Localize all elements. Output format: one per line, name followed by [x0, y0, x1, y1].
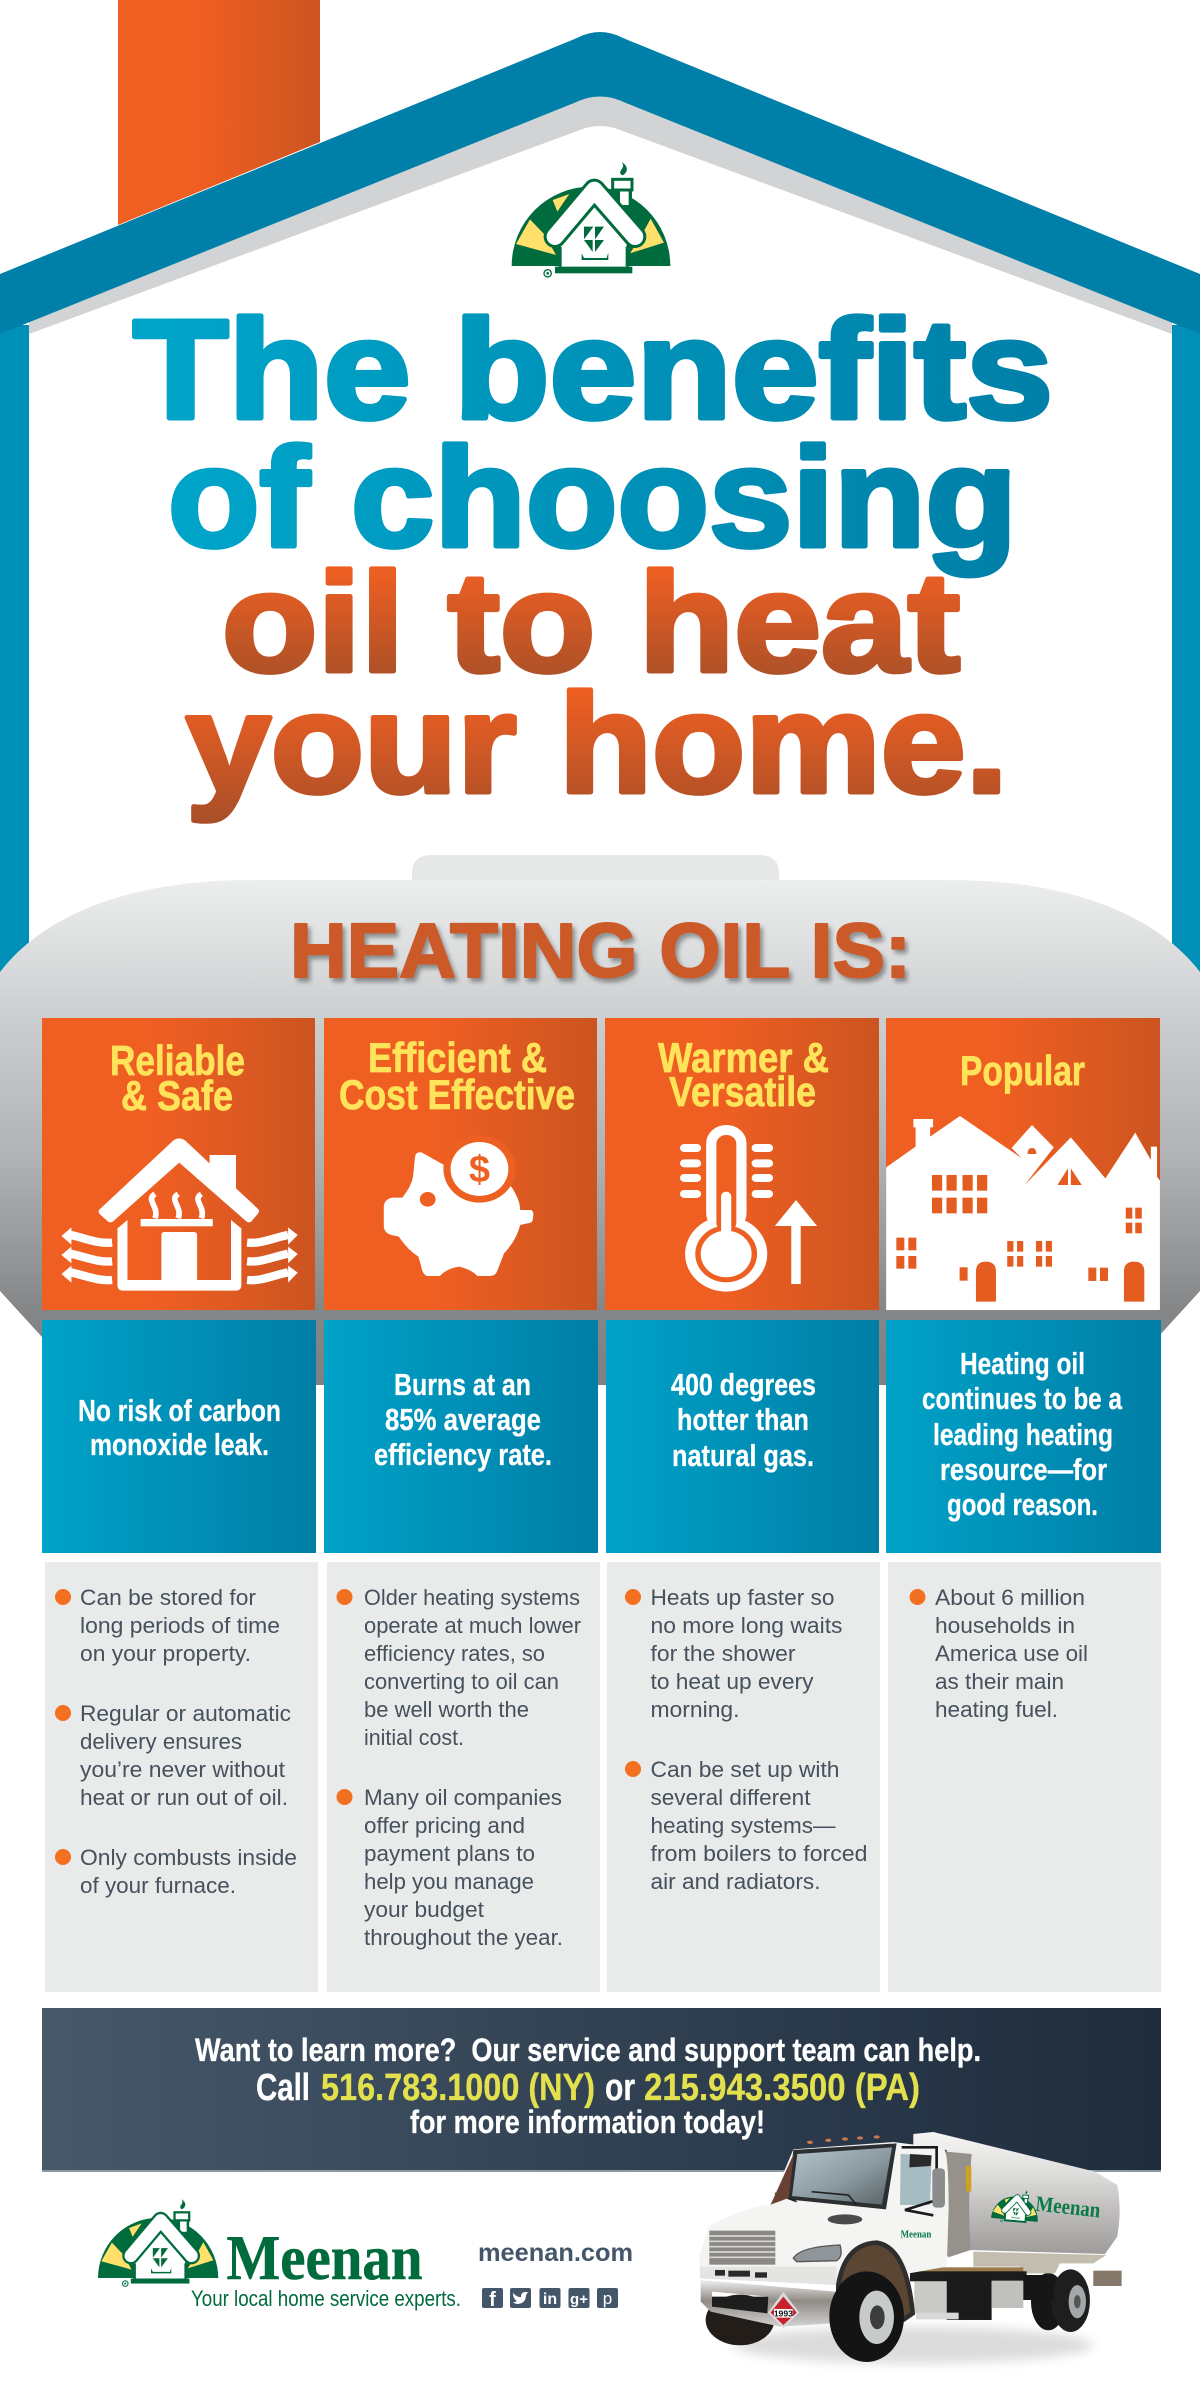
roof underside shadow — [29, 60, 1172, 334]
wordmark: Meenan — [226, 2222, 422, 2293]
panel: efficient and cost effective — [324, 1018, 597, 1310]
title line 1: The benefits — [133, 290, 1053, 448]
list text: initial cost. — [364, 1725, 464, 1750]
heading: efficient and cost effective: Efficient & — [368, 1034, 547, 1081]
heading: reliable and safe: & Safe — [121, 1072, 233, 1119]
list text: air and radiators. — [650, 1869, 820, 1894]
door window — [900, 2147, 937, 2215]
heading: warmer and versatile — [658, 1034, 829, 1115]
heading: warmer and versatile: Versatile — [669, 1068, 816, 1115]
under bumper — [712, 2297, 770, 2313]
list text: heating systems— — [650, 1813, 836, 1838]
text: 400 degrees: natural gas. — [672, 1439, 814, 1473]
list text: Can be stored for — [80, 1585, 256, 1610]
text: heating oil continues: leading heating — [933, 1418, 1113, 1452]
bumper — [701, 2280, 835, 2327]
text: burns at: 85% average — [385, 1403, 541, 1437]
list text: Heats up faster so — [650, 1585, 834, 1610]
panel: bullet list 4 — [888, 1562, 1161, 1992]
hazard placard — [768, 2292, 799, 2328]
list text: to heat up every — [650, 1669, 814, 1694]
list text: of your furnace. — [80, 1873, 236, 1898]
tank logo — [991, 2187, 1040, 2225]
heading: heating oil is: HEATING OIL IS: — [290, 908, 911, 994]
cta line 1: Want to learn more? Our service and support team can help. — [195, 2032, 981, 2068]
cta line 2: phone numbers: or — [605, 2067, 635, 2109]
house walls — [0, 325, 1200, 1005]
list text: as their main — [935, 1669, 1064, 1694]
text: heating oil continues: continues to be a — [922, 1382, 1123, 1416]
cta line 2: phone numbers — [256, 2067, 920, 2109]
mirror — [932, 2168, 945, 2208]
pinterest: p — [603, 2289, 612, 2308]
tank — [913, 2132, 1120, 2257]
cta line 2: phone numbers: 516.783.1000 (NY) — [321, 2067, 595, 2109]
text: heating oil continues: resource—for — [940, 1453, 1107, 1487]
text: no risk: monoxide leak. — [90, 1428, 269, 1462]
heading: efficient and cost effective: Cost Effective — [339, 1071, 575, 1118]
list text: delivery ensures — [80, 1729, 242, 1754]
text: heating oil continues — [922, 1347, 1123, 1522]
list text: payment plans to — [364, 1841, 535, 1866]
chimney — [118, 0, 320, 225]
oil delivery truck — [699, 2132, 1122, 2363]
heading: warmer and versatile: Warmer & — [658, 1034, 829, 1081]
list text: for the shower — [650, 1641, 796, 1666]
list text: America use oil — [935, 1641, 1088, 1666]
oil tank cap — [412, 855, 779, 880]
panel: warmer and versatile — [605, 1018, 879, 1310]
text: burns at: efficiency rate. — [374, 1438, 552, 1472]
roof — [0, 32, 1200, 334]
panel: burns at 85 percent — [324, 1320, 598, 1553]
panel: bullet list 2 — [327, 1562, 600, 1992]
text: heating oil continues: Heating oil — [960, 1347, 1085, 1381]
ground shadow — [733, 2327, 1093, 2363]
list text — [650, 1585, 868, 1894]
side pillar — [771, 2153, 794, 2205]
icon: house with heat arrows — [61, 1138, 298, 1291]
windshield — [775, 2143, 897, 2209]
panel: popular — [886, 1018, 1160, 1310]
title line 4: your home. — [186, 664, 1008, 822]
bullets — [336, 1589, 352, 1805]
title — [133, 290, 1053, 822]
cta line 2: phone numbers: Call — [256, 2067, 310, 2109]
list text: About 6 million — [935, 1585, 1085, 1610]
text: no risk — [78, 1394, 281, 1462]
title line 2: of choosing — [168, 418, 1017, 576]
list text: Many oil companies — [364, 1785, 562, 1810]
heading: reliable and safe — [110, 1037, 245, 1119]
cta line 3: for more information today! — [410, 2104, 765, 2140]
list text: converting to oil can — [364, 1669, 559, 1694]
list text: on your property. — [80, 1641, 251, 1666]
panel: bullet list 1 — [45, 1562, 318, 1992]
title line 3: oil to heat — [222, 543, 960, 701]
headlight — [793, 2245, 841, 2262]
list text: you’re never without — [80, 1757, 285, 1782]
top logo emblem — [512, 162, 670, 277]
front slots — [715, 2270, 767, 2278]
call to action banner — [42, 2008, 1161, 2172]
bullets — [55, 1589, 71, 1865]
bullets — [625, 1589, 641, 1777]
text: 400 degrees: 400 degrees — [671, 1368, 816, 1402]
list text — [364, 1585, 581, 1950]
heading: heating oil is: HEATING OIL IS: — [293, 912, 914, 998]
list text: efficiency rates, so — [364, 1641, 545, 1666]
text: 400 degrees — [671, 1368, 816, 1473]
rear frame — [1093, 2271, 1122, 2286]
heading: popular: Popular — [960, 1047, 1085, 1094]
list text: throughout the year. — [364, 1925, 563, 1950]
hazard placard: 1993 — [774, 2309, 793, 2319]
list text: from boilers to forced — [650, 1841, 868, 1866]
list text: several different — [650, 1785, 810, 1810]
list text: morning. — [650, 1697, 740, 1722]
text: heating oil continues: good reason. — [947, 1488, 1098, 1522]
icon: piggy bank: $ — [469, 1149, 490, 1191]
front left tire — [706, 2295, 774, 2345]
text: 400 degrees: hotter than — [677, 1403, 809, 1437]
cta line 2: phone numbers: 215.943.3500 (PA) — [644, 2067, 920, 2109]
tank wordmark: Meenan — [1034, 2191, 1102, 2222]
panel: leading heating resource — [886, 1320, 1161, 1553]
panel: reliable and safe — [42, 1018, 315, 1310]
grille — [709, 2231, 775, 2265]
list text: operate at much lower — [364, 1613, 581, 1638]
chassis — [910, 2252, 1107, 2320]
website: meenan.com — [478, 2239, 633, 2267]
icon: neighborhood houses — [886, 1116, 1160, 1310]
list text: households in — [935, 1613, 1075, 1638]
text: no risk: No risk of carbon — [78, 1394, 281, 1428]
oil tank body — [0, 880, 1200, 1385]
linkedin: in — [543, 2291, 557, 2308]
icon: thermometer with up arrow — [680, 1125, 817, 1292]
logo emblem — [98, 2199, 218, 2286]
list text: Can be set up with — [650, 1757, 840, 1782]
list text: offer pricing and — [364, 1813, 525, 1838]
list text: help you manage — [364, 1869, 534, 1894]
door wordmark: Meenan — [901, 2229, 931, 2240]
front wheel — [829, 2271, 904, 2362]
bullet — [910, 1589, 926, 1605]
panel: no risk of carbon monoxide — [42, 1320, 316, 1553]
roof marker lights — [807, 2135, 880, 2144]
list text: your budget — [364, 1897, 484, 1922]
list text: no more long waits — [650, 1613, 842, 1638]
list text: Older heating systems — [364, 1585, 580, 1610]
twitter — [510, 2288, 531, 2308]
rear wheels — [1031, 2269, 1090, 2332]
list text: heat or run out of oil. — [80, 1785, 288, 1810]
list text: be well worth the — [364, 1697, 529, 1722]
heading: reliable and safe: Reliable — [110, 1037, 245, 1084]
list text — [80, 1585, 297, 1898]
text: burns at — [374, 1368, 552, 1472]
wheel arch — [838, 2243, 913, 2327]
icon: piggy bank — [384, 1135, 533, 1276]
text: burns at: Burns at an — [394, 1368, 531, 1402]
panel: bullet list 3 — [607, 1562, 880, 1992]
list text: Regular or automatic — [80, 1701, 291, 1726]
lower hood shading — [700, 2267, 837, 2285]
list text — [935, 1585, 1088, 1722]
tagline: Your local home service experts. — [191, 2286, 461, 2311]
list text: heating fuel. — [935, 1697, 1058, 1722]
social icons — [482, 2288, 618, 2311]
list text: long periods of time — [80, 1613, 280, 1638]
google plus: g+ — [570, 2291, 588, 2308]
panel: 400 degrees hotter — [606, 1320, 879, 1553]
footer logo — [98, 2199, 461, 2311]
hood vent — [828, 2214, 862, 2224]
heading: efficient and cost effective — [339, 1034, 575, 1118]
cab — [699, 2142, 949, 2285]
facebook: f — [489, 2289, 496, 2311]
list text: Only combusts inside — [80, 1845, 297, 1870]
